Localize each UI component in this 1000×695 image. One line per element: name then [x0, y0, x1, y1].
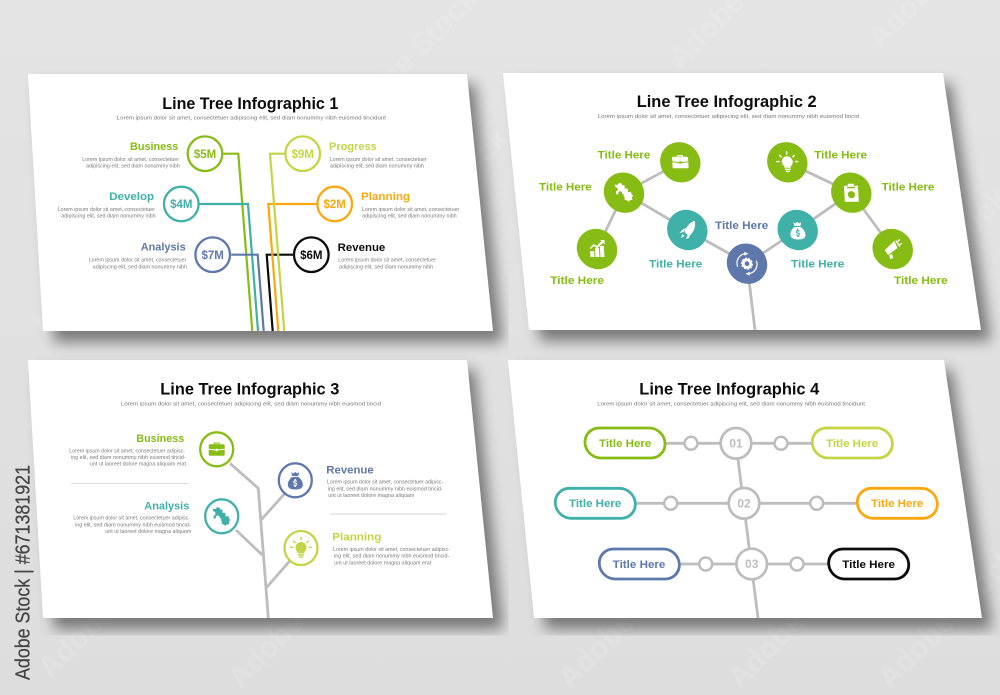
stock id label: Adobe Stock | #671381921 — [12, 465, 34, 680]
node: Planning: Lorem ipsum dolor sit amet, consectetuer — [362, 207, 459, 213]
title 3: Line Tree Infographic 3 — [160, 380, 339, 398]
small joint circles — [664, 437, 823, 570]
node: Business: Business — [136, 433, 184, 445]
node: Analysis: ing elit, sed diam nonummy nibh euismod tincid- — [75, 522, 191, 528]
node: Planning: Lorem ipsum dolor sit amet, consectetuer adipisc- — [333, 547, 450, 553]
node: Analysis: unt ut laoreet dolore magna aliquam — [105, 529, 192, 535]
panel: infographic 2 — [503, 73, 991, 341]
node: Business: Business — [130, 141, 178, 153]
panel: infographic 1 — [28, 74, 503, 342]
labels: Title Here — [550, 275, 604, 287]
node: Develop: Lorem ipsum dolor sit amet, consectetuer — [58, 207, 155, 213]
node: Planning: $2M — [324, 199, 346, 211]
node: Planning: ing elit, sed diam nonummy nibh euismod tincid- — [334, 554, 449, 560]
pill: teal — [554, 488, 636, 518]
node: Planning — [284, 531, 450, 566]
node: Analysis: Lorem ipsum dolor sit amet, consectetuer adipisc- — [73, 516, 190, 522]
node: Planning — [317, 187, 459, 221]
node 02 — [729, 488, 759, 519]
node: Business: unt ut laoreet dolore magna aliquam erat — [90, 462, 186, 468]
node: Revenue — [294, 237, 436, 272]
node: Business: ing elit, sed diam nonummy nibh euismod tincid- — [71, 455, 186, 461]
node: clipboard — [830, 172, 873, 213]
title 1: Line Tree Infographic 1 — [162, 94, 338, 113]
subtitle 1: Lorem ipsum dolor sit amet, consectetuer adipiscing elit, sed diam nonummy nibh euismod tincidunt — [117, 116, 386, 122]
pill: lime: Title Here — [826, 438, 878, 450]
node: Analysis — [73, 499, 238, 535]
node: Develop — [58, 187, 199, 221]
labels: Title Here — [791, 258, 844, 270]
node: Analysis: Analysis — [144, 500, 189, 512]
pill: blue — [598, 549, 680, 579]
node 03: 03 — [745, 557, 759, 571]
node: Progress: adipiscing elit, sed diam nonummy nibh — [330, 164, 424, 170]
node: Develop: Develop — [109, 191, 154, 203]
node: Analysis — [89, 237, 230, 272]
node: Analysis: $7M — [202, 250, 224, 262]
subtitle 3: Lorem ipsum dolor sit amet, consectetuer adipiscing elit, sed diam nonummy nibh euismod tincid — [121, 402, 381, 408]
node: Planning: Planning — [361, 191, 410, 203]
node: Business — [69, 432, 233, 468]
labels: Title Here — [882, 182, 934, 194]
pill: lime — [811, 428, 893, 458]
node 02: 02 — [737, 496, 751, 510]
node: Progress: $9M — [292, 149, 314, 161]
node: Planning: adipiscing elit, sed diam nonummy nibh — [362, 214, 457, 220]
node: Analysis: Analysis — [141, 242, 186, 254]
node: puzzle — [603, 172, 645, 213]
node: Revenue — [279, 463, 443, 499]
node: briefcase — [659, 142, 702, 182]
node: Planning: Planning — [332, 532, 381, 544]
subtitle 4: Lorem ipsum dolor sit amet, consectetuer adipiscing elit, sed diam nonummy nibh euismod tincidunt — [597, 402, 865, 408]
node: center gear — [726, 244, 768, 284]
watermarks: Adobe Stock — [552, 542, 705, 695]
node: Business: Lorem ipsum dolor sit amet, consectetuer adipisc- — [69, 448, 185, 454]
labels: Title Here — [598, 149, 650, 161]
node: Analysis: adipiscing elit, sed diam nonummy nibh — [93, 264, 187, 270]
connector lines — [597, 162, 893, 330]
node: Business: $5M — [194, 149, 216, 161]
node: Develop: $4M — [170, 199, 192, 211]
node: Business: Lorem ipsum dolor sit amet, consectetuer — [82, 157, 179, 163]
labels: Title Here — [715, 220, 768, 232]
pill: blue: Title Here — [613, 559, 665, 571]
pill: green: Title Here — [599, 438, 651, 450]
node: Revenue: unt ut laoreet dolore magna aliquam — [328, 493, 415, 499]
connector lines — [630, 443, 865, 618]
node: Progress: Lorem ipsum dolor sit amet, consectetuer — [330, 157, 427, 163]
labels: Title Here — [649, 258, 702, 270]
labels — [539, 149, 948, 287]
panel: infographic 3 — [28, 360, 503, 629]
node 01: 01 — [729, 436, 743, 450]
node: rocket — [666, 210, 709, 250]
node: Business: adipiscing elit, sed diam nonummy nibh — [86, 164, 180, 170]
watermarks: Adobe Stock — [362, 122, 515, 275]
node: Planning: unt ut laoreet dolore magna aliquam erat — [334, 560, 432, 566]
watermarks: Adobe Stock — [222, 542, 375, 695]
node: Revenue: adipiscing elit, sed diam nonummy nibh — [339, 264, 433, 270]
tree trunk and branches — [230, 463, 290, 618]
node: money bag — [776, 210, 819, 250]
labels: Title Here — [539, 182, 592, 194]
pill: green — [584, 428, 666, 458]
title 4: Line Tree Infographic 4 — [639, 380, 820, 398]
node: chart — [576, 229, 618, 269]
node: Revenue: $6M — [300, 250, 322, 262]
pill: orange: Title Here — [871, 498, 923, 510]
node: Develop: adipiscing elit, sed diam nonummy nibh — [61, 214, 156, 220]
node: Progress: Progress — [329, 141, 377, 153]
node: Analysis: Lorem ipsum dolor sit amet, consectetuer — [89, 258, 187, 264]
pill: teal: Title Here — [569, 498, 621, 510]
node: Revenue: Revenue — [326, 464, 374, 476]
pill: orange — [856, 488, 938, 518]
pill: black — [828, 549, 910, 579]
node: Progress — [285, 136, 427, 171]
watermarks: Adobe Stock — [32, 532, 185, 685]
watermarks: Adobe Stock — [27, 192, 180, 345]
subtitle 2: Lorem ipsum dolor sit amet, consectetuer adipiscing elit, sed diam nonummy nibh euismod tincid — [598, 114, 859, 120]
node 01 — [721, 428, 751, 459]
node: megaphone — [871, 229, 914, 269]
node: Revenue: ing elit, sed diam nonummy nibh euismod tincid- — [328, 486, 443, 492]
node 03 — [736, 549, 767, 579]
labels: Title Here — [814, 149, 867, 161]
node: light bulb — [766, 142, 809, 182]
node: Revenue: Revenue — [338, 242, 385, 254]
pill: black: Title Here — [842, 559, 895, 571]
node: Revenue: Lorem ipsum dolor sit amet, consectetuer — [338, 258, 436, 264]
watermarks: Adobe Stock — [722, 542, 875, 695]
node: Revenue: Lorem ipsum dolor sit amet, consectetuer adipisc- — [327, 480, 443, 486]
panel: infographic 4 — [508, 360, 992, 629]
dividers — [71, 483, 447, 514]
title 2: Line Tree Infographic 2 — [637, 92, 817, 111]
labels: Title Here — [894, 275, 948, 287]
tree lines — [199, 154, 317, 331]
node: Business — [82, 136, 222, 171]
